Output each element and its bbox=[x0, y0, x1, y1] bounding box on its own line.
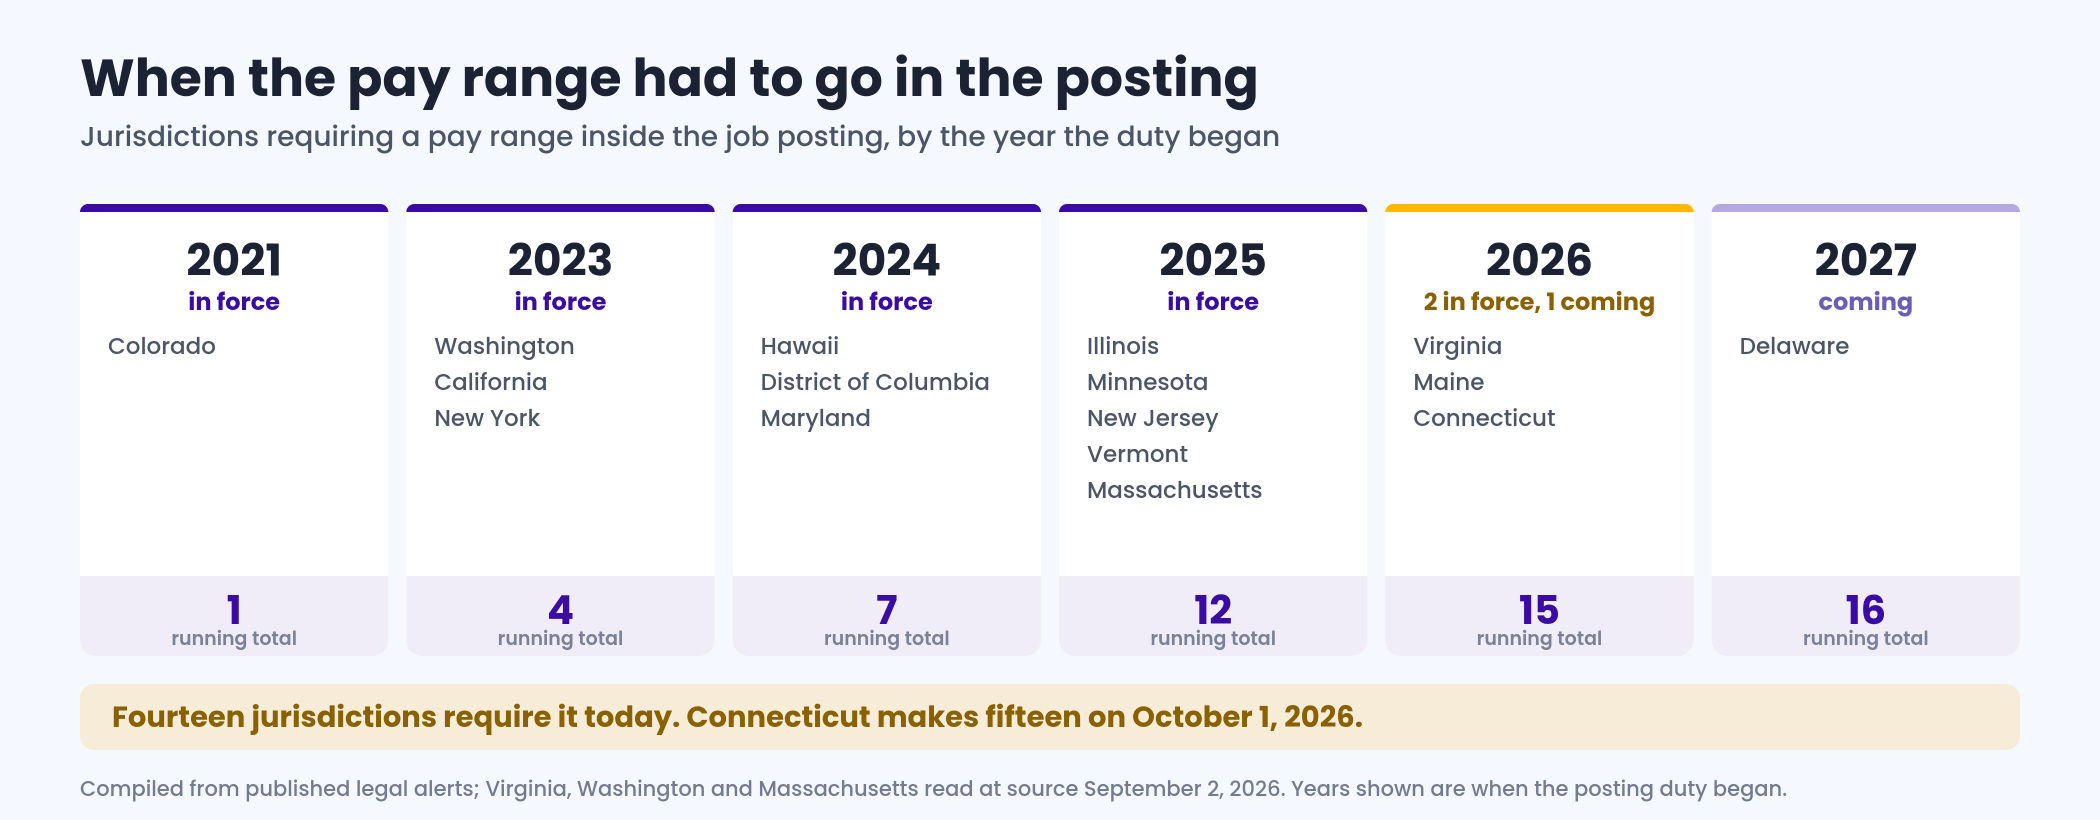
panel: 2027: 16 bbox=[1846, 582, 1886, 638]
panel: 2023: California bbox=[434, 367, 548, 399]
panel: 2023: running total bbox=[498, 625, 623, 652]
panel: 2025: Illinois bbox=[1087, 331, 1159, 363]
panel: 2023: 2023 bbox=[508, 230, 613, 292]
panel: 2025 bbox=[1059, 204, 1367, 656]
panel: 2023: Washington bbox=[434, 331, 575, 363]
panel: 2025: New Jersey bbox=[1087, 403, 1219, 435]
title: When the pay range had to go in the posting bbox=[80, 42, 1259, 115]
panel: 2024 bbox=[733, 204, 1041, 656]
panel: 2023: in force bbox=[515, 286, 607, 319]
panel: 2024: 2024 bbox=[832, 230, 941, 292]
footnote: Compiled from published legal alerts; Virginia, Washington and Massachusetts read at source September 2, 2026. Years shown are when the posting duty began. bbox=[80, 775, 1787, 804]
panel: 2024: running total bbox=[824, 625, 950, 652]
panel: 2025: in force bbox=[1167, 286, 1259, 319]
panel: 2021: running total bbox=[171, 625, 297, 652]
panel: 2021: in force bbox=[188, 286, 280, 319]
panel: 2024: District of Columbia bbox=[761, 367, 990, 399]
panel: 2027: Delaware bbox=[1740, 331, 1849, 363]
panel: 2026: 2 in force, 1 coming bbox=[1424, 286, 1655, 319]
panel: 2021: 2021 bbox=[186, 230, 282, 292]
panel: 2025: Massachusetts bbox=[1087, 475, 1263, 507]
panel: 2023: New York bbox=[434, 403, 540, 435]
callout banner: Fourteen jurisdictions require it today. Connecticut makes fifteen on October 1, 2026. bbox=[112, 698, 1363, 738]
panel: 2024: Hawaii bbox=[761, 331, 839, 363]
panel: 2027: coming bbox=[1818, 286, 1913, 319]
panel: 2024: in force bbox=[841, 286, 933, 319]
panel: 2026: Virginia bbox=[1413, 331, 1502, 363]
panel: 2025: Minnesota bbox=[1087, 367, 1209, 399]
panel: 2021 bbox=[80, 204, 388, 656]
panel: 2024: Maryland bbox=[761, 403, 871, 435]
panel: 2025: running total bbox=[1150, 625, 1276, 652]
panel: 2026: Connecticut bbox=[1413, 403, 1556, 435]
panel: 2025: 2025 bbox=[1159, 230, 1267, 292]
panel: 2021: 1 bbox=[227, 582, 242, 638]
panel: 2024: 7 bbox=[876, 582, 898, 638]
panel: 2023: 4 bbox=[547, 582, 574, 638]
panel: 2023 bbox=[406, 204, 715, 656]
panel: 2026: 15 bbox=[1519, 582, 1560, 638]
panel: 2025: Vermont bbox=[1087, 439, 1188, 471]
panel: 2027: running total bbox=[1803, 625, 1929, 652]
panel: 2025: 12 bbox=[1194, 582, 1232, 638]
panel: 2027 bbox=[1712, 204, 2020, 656]
callout banner bbox=[80, 684, 2020, 750]
panel: 2027: 2027 bbox=[1815, 230, 1917, 292]
panel: 2026 bbox=[1385, 204, 1694, 656]
panel: 2026: 2026 bbox=[1486, 230, 1593, 292]
panel: 2021: Colorado bbox=[108, 331, 216, 363]
panel: 2026: running total bbox=[1477, 625, 1602, 652]
subtitle: Jurisdictions requiring a pay range inside the job posting, by the year the duty began bbox=[80, 117, 1280, 156]
panel: 2026: Maine bbox=[1413, 367, 1484, 399]
